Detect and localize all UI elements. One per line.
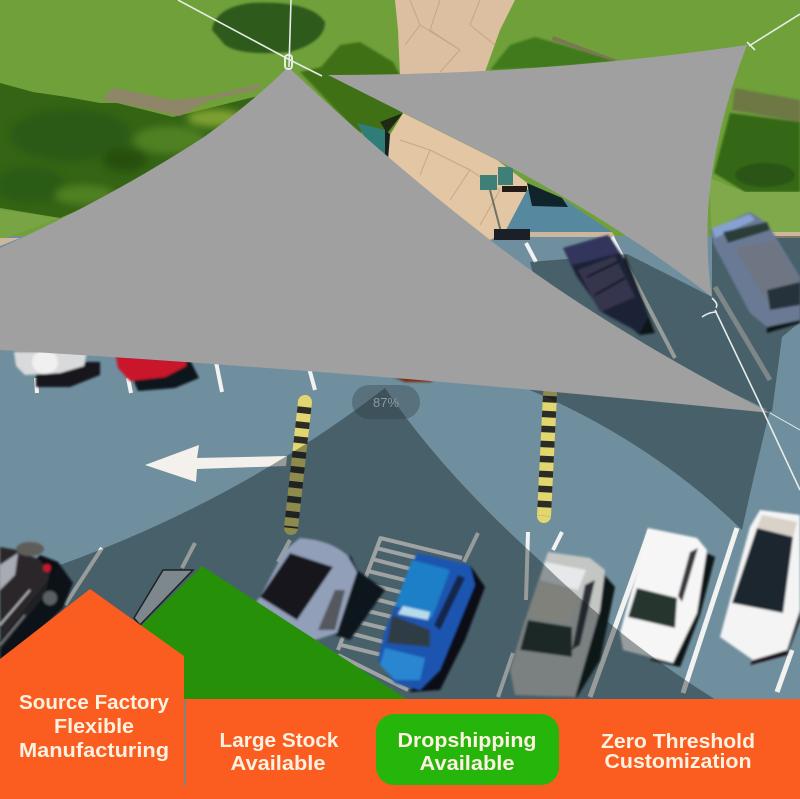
arrow: road marking: [145, 445, 287, 482]
hedge: right: [714, 88, 800, 192]
text: source factory flexible manufacturing: Source Factory: [19, 692, 170, 714]
text: source factory flexible manufacturing: Flexible: [54, 716, 134, 738]
building edge shadow: [527, 183, 568, 207]
car: silver, partly hidden: [134, 570, 193, 625]
green triangle accent: [142, 566, 408, 700]
hedge: left: [0, 83, 262, 218]
car: navy: [563, 235, 655, 335]
zebra crossing: [338, 537, 462, 690]
sail: upper right grey triangle: [328, 45, 747, 297]
green pill: dropshipping: [376, 714, 559, 785]
badge: 87%: 87%: [373, 395, 399, 410]
orange house panel: source factory: [0, 589, 184, 786]
car: white hatch: [720, 510, 800, 665]
hedge: between sails: [300, 42, 403, 135]
speed bump: right: [544, 394, 550, 516]
car: blue-grey: [710, 212, 800, 333]
lawn: right lower: [709, 178, 800, 236]
text: dropshipping available: Available: [420, 753, 514, 775]
text: zero threshold customization: Customization: [604, 751, 752, 773]
badge: 87%: [352, 385, 420, 419]
speed bump: left: [291, 402, 305, 528]
hedge: upper centre right: [490, 37, 617, 70]
teal planter and lamp: [480, 167, 513, 190]
ropes and hooks: [178, 0, 800, 490]
sail: large grey triangle: [0, 67, 770, 413]
walkway stone joints: [400, 0, 500, 225]
dirt bed: [103, 83, 265, 116]
text: source factory flexible manufacturing: [19, 692, 170, 762]
curb: [0, 232, 800, 246]
bush: round top: [212, 3, 325, 53]
stone walkway: lower: [388, 113, 530, 240]
car: blue: [378, 553, 485, 692]
teal bin: [357, 123, 385, 157]
lawn: left lower: [0, 210, 60, 240]
dirt line: [552, 36, 617, 60]
parking markings: [36, 237, 792, 697]
car: black, left edge: [0, 542, 73, 670]
car: white sedan: [620, 528, 715, 667]
car: red: [115, 352, 440, 391]
text: large stock available: [220, 730, 339, 775]
text: large stock available: Available: [230, 753, 326, 775]
stone walkway: upper: [395, 0, 515, 76]
text: zero threshold customization: Zero Threshold: [601, 731, 755, 753]
shade sail shadow: large triangle: [0, 388, 716, 700]
lit ramp: [505, 190, 612, 232]
text: dropshipping available: [398, 730, 536, 775]
text: zero threshold customization: [601, 731, 755, 773]
shade sail shadow: upper right: [530, 236, 800, 412]
text: dropshipping available: Dropshipping: [398, 730, 536, 752]
orange bottom bar: [0, 699, 800, 799]
shade sail shadow: right: [525, 388, 770, 530]
car: silver sedan: [510, 552, 615, 697]
text: large stock available: Large Stock: [220, 730, 339, 752]
text: source factory flexible manufacturing: Manufacturing: [19, 740, 169, 762]
car: grey-blue: [240, 538, 385, 645]
car: white, rear visible: [14, 350, 100, 387]
